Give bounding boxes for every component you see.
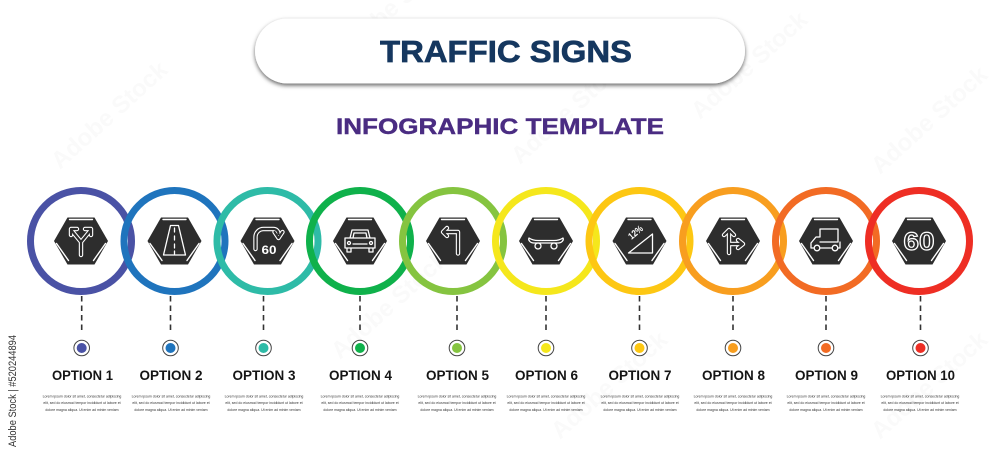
- description 7: Lorem ipsum dolor sit amet, consectetur adipiscing: [601, 394, 679, 398]
- marker 7: [632, 340, 647, 356]
- description 7: [601, 394, 679, 412]
- watermark: Adobe Stock: [546, 326, 674, 444]
- connector 7: [638, 296, 640, 334]
- connector 9: [825, 296, 827, 334]
- option 2: [124, 190, 225, 412]
- description 4: elit, sed do eiusmod tempor incididunt ut labore et: [321, 401, 399, 405]
- icon: truck: [799, 218, 853, 264]
- description 3: elit, sed do eiusmod tempor incididunt ut labore et: [225, 401, 303, 405]
- label 3: OPTION 3: [232, 368, 296, 383]
- label 9: OPTION 9: [795, 368, 858, 383]
- description 1: dolore magna aliqua. Ut enim ad minim veniam: [45, 408, 119, 412]
- ring 5: [402, 190, 504, 292]
- watermark: Adobe Stock: [686, 6, 814, 124]
- description 2: Lorem ipsum dolor sit amet, consectetur adipiscing: [132, 394, 210, 398]
- description 9: elit, sed do eiusmod tempor incididunt ut labore et: [787, 401, 865, 405]
- marker 4: [352, 340, 368, 356]
- description 4: dolore magna aliqua. Ut enim ad minim veniam: [323, 408, 397, 412]
- option 6: [496, 190, 596, 412]
- option 10: [868, 190, 970, 412]
- icon: 12% slope: [612, 218, 666, 264]
- ring 2: [124, 190, 225, 292]
- ring 1: [30, 190, 132, 292]
- description 2: [132, 394, 210, 412]
- marker 1: [74, 340, 89, 356]
- connector 3: [262, 296, 264, 334]
- description 3: [225, 394, 303, 412]
- description 5: elit, sed do eiusmod tempor incididunt ut labore et: [418, 401, 496, 405]
- option 4: [310, 190, 410, 412]
- connector 4: [359, 296, 361, 334]
- label 2: OPTION 2: [140, 368, 202, 383]
- description 1: elit, sed do eiusmod tempor incididunt ut labore et: [43, 401, 121, 405]
- icon: fork road: [54, 218, 108, 264]
- description 8: elit, sed do eiusmod tempor incididunt ut labore et: [694, 401, 772, 405]
- marker 10: [913, 340, 928, 356]
- icon: turn with speed 60: [240, 218, 294, 264]
- ring 4: [310, 190, 410, 292]
- ring 7: [589, 190, 690, 292]
- description 6: elit, sed do eiusmod tempor incididunt ut labore et: [507, 401, 585, 405]
- description 6: [507, 394, 585, 412]
- label 4: OPTION 4: [329, 368, 392, 383]
- connector 2: [170, 296, 172, 334]
- marker 5: [449, 340, 465, 356]
- ring 10: [868, 190, 970, 292]
- connector 10: [920, 296, 922, 334]
- watermark: Adobe Stock: [46, 56, 174, 174]
- icon: turn with speed 60: 60: [262, 243, 277, 257]
- icon: road: [148, 218, 202, 264]
- icon: 12% slope: 12%: [626, 223, 646, 242]
- option 8: [682, 190, 784, 412]
- label 5: OPTION 5: [426, 368, 489, 383]
- description 10: Lorem ipsum dolor sit amet, consectetur adipiscing: [881, 394, 959, 398]
- connector 5: [456, 296, 458, 334]
- description 6: dolore magna aliqua. Ut enim ad minim veniam: [509, 408, 583, 412]
- label 10: OPTION 10: [886, 368, 955, 383]
- description 7: dolore magna aliqua. Ut enim ad minim veniam: [603, 408, 677, 412]
- ring 9: [776, 190, 876, 292]
- marker 8: [725, 340, 741, 356]
- description 5: [418, 394, 496, 412]
- description 9: dolore magna aliqua. Ut enim ad minim veniam: [789, 408, 863, 412]
- description 1: [43, 394, 121, 412]
- watermark: Adobe Stock: [326, 246, 454, 364]
- ring 6: [496, 190, 596, 292]
- connector 6: [545, 296, 547, 334]
- description 9: Lorem ipsum dolor sit amet, consectetur adipiscing: [787, 394, 865, 398]
- icon: speed limit 60: 60: [904, 228, 934, 256]
- subtitle: INFOGRAPHIC TEMPLATE: [336, 114, 664, 139]
- label 6: OPTION 6: [515, 368, 578, 383]
- ring 3: [217, 190, 318, 292]
- watermark: Adobe Stock: [866, 326, 994, 444]
- description 3: dolore magna aliqua. Ut enim ad minim veniam: [227, 408, 301, 412]
- title: TRAFFIC SIGNS: [380, 35, 632, 69]
- description 3: Lorem ipsum dolor sit amet, consectetur adipiscing: [225, 394, 303, 398]
- icon: speed limit 60: [892, 218, 946, 264]
- description 10: [881, 394, 959, 412]
- option 3: [217, 190, 318, 412]
- connector 1: [81, 296, 83, 334]
- icon: left turn arrow: [426, 218, 480, 264]
- description 10: elit, sed do eiusmod tempor incididunt ut labore et: [881, 401, 959, 405]
- stock id text: Adobe Stock | #520244894: [7, 335, 19, 447]
- connector 8: [732, 296, 734, 334]
- icon: up and right arrows: [706, 218, 760, 264]
- option 5: [402, 190, 504, 412]
- description 7: elit, sed do eiusmod tempor incididunt ut labore et: [601, 401, 679, 405]
- watermark: Adobe Stock: [866, 61, 994, 179]
- label 7: OPTION 7: [608, 368, 672, 383]
- description 5: Lorem ipsum dolor sit amet, consectetur adipiscing: [418, 394, 496, 398]
- marker 6: [538, 340, 554, 356]
- description 1: Lorem ipsum dolor sit amet, consectetur adipiscing: [43, 394, 121, 398]
- title pill: [255, 18, 745, 84]
- description 9: [787, 394, 865, 412]
- marker 3: [256, 340, 271, 356]
- option 9: [776, 190, 876, 412]
- label 1: OPTION 1: [52, 368, 113, 383]
- marker 9: [818, 340, 834, 356]
- watermark: Adobe Stock: [506, 51, 634, 169]
- marker 2: [163, 340, 178, 356]
- icon: car: [333, 218, 387, 264]
- ring 8: [682, 190, 784, 292]
- description 8: dolore magna aliqua. Ut enim ad minim veniam: [696, 408, 770, 412]
- icon: skateboard: [519, 218, 573, 264]
- description 4: [321, 394, 399, 412]
- description 5: dolore magna aliqua. Ut enim ad minim veniam: [420, 408, 494, 412]
- option 7: [589, 190, 690, 412]
- description 8: [694, 394, 772, 412]
- description 10: dolore magna aliqua. Ut enim ad minim veniam: [883, 408, 957, 412]
- description 8: Lorem ipsum dolor sit amet, consectetur adipiscing: [694, 394, 772, 398]
- option 1: [30, 190, 132, 412]
- description 2: dolore magna aliqua. Ut enim ad minim veniam: [134, 408, 208, 412]
- description 4: Lorem ipsum dolor sit amet, consectetur adipiscing: [321, 394, 399, 398]
- description 6: Lorem ipsum dolor sit amet, consectetur adipiscing: [507, 394, 585, 398]
- description 2: elit, sed do eiusmod tempor incididunt ut labore et: [132, 401, 210, 405]
- label 8: OPTION 8: [702, 368, 765, 383]
